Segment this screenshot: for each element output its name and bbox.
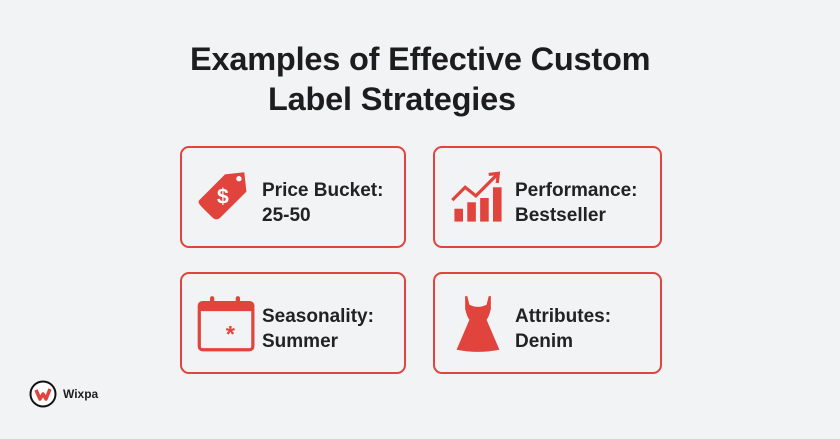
text: price bucket: Price Bucket: bbox=[262, 180, 383, 201]
text: attributes: Denim bbox=[515, 331, 573, 352]
panel: price bucket bbox=[180, 146, 406, 248]
logo: Wixpa: Wixpa bbox=[63, 387, 98, 401]
text: performance: Bestseller bbox=[515, 205, 606, 226]
text: price bucket: 25-50 bbox=[262, 205, 311, 226]
panel: performance bbox=[433, 146, 662, 248]
icon: calendar: * bbox=[226, 321, 236, 347]
title bbox=[190, 41, 650, 117]
panel: attributes bbox=[433, 272, 662, 374]
text: seasonality: Summer bbox=[262, 331, 338, 352]
icon: price tag bbox=[198, 172, 246, 220]
text: price bucket bbox=[262, 180, 383, 226]
text: seasonality: Seasonality: bbox=[262, 306, 374, 327]
text: attributes: Attributes: bbox=[515, 306, 611, 327]
panel: seasonality bbox=[180, 272, 406, 374]
icon: price tag: $ bbox=[217, 184, 229, 208]
text: seasonality bbox=[262, 306, 374, 352]
icon: bar chart trending up bbox=[451, 172, 502, 222]
logo: Wixpa bbox=[30, 380, 98, 408]
text: Label Strategies bbox=[268, 81, 516, 117]
text: performance: Performance: bbox=[515, 180, 638, 201]
text: performance bbox=[515, 180, 638, 226]
text: attributes bbox=[515, 306, 611, 352]
icon: calendar bbox=[198, 296, 254, 352]
icon: dress bbox=[456, 296, 500, 352]
text: Examples of Effective Custom bbox=[190, 41, 650, 77]
